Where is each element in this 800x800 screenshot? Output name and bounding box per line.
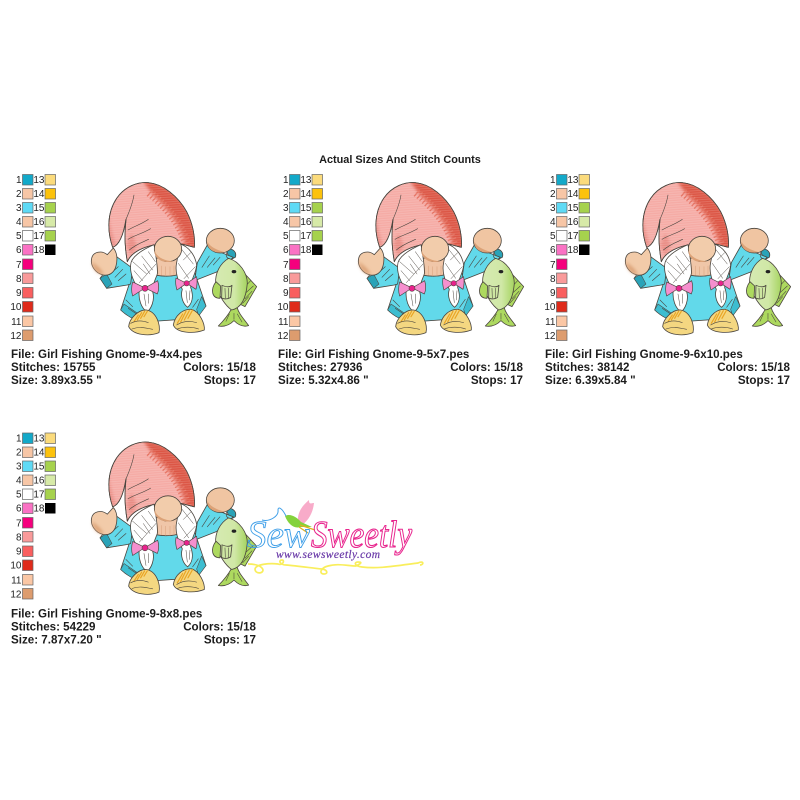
caption: Size: 6.39x5.84 " bbox=[545, 374, 636, 387]
color palette: 16 bbox=[33, 476, 45, 486]
color palette: 15 bbox=[33, 462, 45, 472]
color palette: 8 bbox=[283, 274, 289, 285]
color palette bbox=[10, 433, 56, 600]
color palette: 4 bbox=[16, 476, 22, 486]
gnome illustration bbox=[358, 182, 524, 335]
caption: File: Girl Fishing Gnome-9-6x10.pes bbox=[545, 348, 743, 361]
color palette: 13 bbox=[300, 175, 312, 186]
color palette: 4 bbox=[16, 217, 22, 228]
caption: Stitches: 38142 bbox=[545, 361, 629, 374]
icon: hummingbird bbox=[262, 500, 315, 533]
color palette: 2 bbox=[16, 448, 22, 458]
website url: www.sewsweetly.com bbox=[276, 549, 380, 561]
color palette: 7 bbox=[283, 260, 289, 271]
color palette: 18 bbox=[300, 245, 312, 256]
color palette: 14 bbox=[300, 189, 312, 200]
color palette: 6 bbox=[550, 245, 556, 256]
color palette: 9 bbox=[550, 288, 556, 299]
caption: Stops: 17 bbox=[738, 374, 790, 387]
caption: Colors: 15/18 bbox=[450, 361, 524, 374]
color palette: 7 bbox=[16, 518, 22, 530]
caption: File: Girl Fishing Gnome-9-4x4.pes bbox=[11, 348, 202, 361]
color palette: 13 bbox=[33, 434, 45, 444]
color palette: 5 bbox=[16, 231, 22, 242]
color palette: 6 bbox=[16, 245, 22, 256]
color palette: 1 bbox=[283, 175, 289, 186]
color palette: 13 bbox=[567, 175, 579, 186]
color palette: 16 bbox=[300, 217, 312, 228]
color palette: 8 bbox=[550, 274, 556, 285]
panel: 5x7 design bbox=[277, 174, 524, 387]
color palette: 5 bbox=[16, 490, 22, 500]
caption: Stops: 17 bbox=[204, 374, 256, 387]
color palette: 10 bbox=[10, 302, 22, 313]
color palette: 10 bbox=[544, 302, 556, 313]
panel: 4x4 design bbox=[10, 174, 257, 387]
title: Actual Sizes And Stitch Counts bbox=[319, 154, 481, 166]
gnome illustration bbox=[91, 441, 257, 594]
logo: Sew Sweetly bbox=[247, 500, 423, 574]
color palette: 10 bbox=[277, 302, 289, 313]
logo: Sew Sweetly: Sweetly bbox=[311, 514, 412, 556]
color palette bbox=[277, 174, 322, 342]
caption bbox=[11, 348, 257, 387]
caption: Size: 7.87x7.20 " bbox=[11, 634, 102, 646]
color palette: 5 bbox=[550, 231, 556, 242]
color palette: 3 bbox=[16, 462, 22, 472]
caption: Colors: 15/18 bbox=[183, 620, 257, 634]
caption: Stitches: 15755 bbox=[11, 361, 96, 374]
color palette: 11 bbox=[545, 317, 556, 328]
color palette: 14 bbox=[33, 448, 45, 458]
caption: Stops: 17 bbox=[471, 374, 523, 387]
color palette: 7 bbox=[550, 260, 556, 271]
color palette: 6 bbox=[283, 245, 289, 256]
color palette: 16 bbox=[33, 217, 45, 228]
color palette: 12 bbox=[277, 331, 289, 342]
caption: Size: 5.32x4.86 " bbox=[278, 374, 369, 387]
color palette: 11 bbox=[278, 317, 289, 328]
caption: Colors: 15/18 bbox=[183, 361, 257, 374]
color palette: 17 bbox=[33, 231, 45, 242]
color palette: 17 bbox=[567, 231, 579, 242]
color palette: 15 bbox=[33, 203, 45, 214]
color palette: 12 bbox=[10, 331, 22, 342]
color palette: 9 bbox=[16, 546, 22, 558]
panel: 8x8 design bbox=[10, 433, 257, 646]
color palette: 18 bbox=[33, 504, 45, 514]
color palette: 12 bbox=[10, 590, 22, 600]
caption: Stops: 17 bbox=[204, 634, 256, 646]
color palette: 4 bbox=[550, 217, 556, 228]
color palette: 2 bbox=[16, 189, 22, 200]
color palette: 5 bbox=[283, 231, 289, 242]
color palette: 18 bbox=[567, 245, 579, 256]
caption: Colors: 15/18 bbox=[717, 361, 791, 374]
color palette: 7 bbox=[16, 260, 22, 271]
color palette: 15 bbox=[567, 203, 579, 214]
caption bbox=[278, 348, 524, 387]
color palette: 4 bbox=[283, 217, 289, 228]
color palette: 18 bbox=[33, 245, 45, 256]
color palette: 3 bbox=[550, 203, 556, 214]
color palette: 13 bbox=[33, 175, 45, 186]
color palette: 9 bbox=[283, 288, 289, 299]
color palette: 1 bbox=[550, 175, 556, 186]
color palette: 2 bbox=[283, 189, 289, 200]
caption: Size: 3.89x3.55 " bbox=[11, 374, 102, 387]
caption: Stitches: 54229 bbox=[11, 620, 96, 634]
color palette: 6 bbox=[16, 504, 22, 514]
caption bbox=[545, 348, 791, 387]
color palette: 17 bbox=[300, 231, 312, 242]
color palette: 11 bbox=[11, 317, 22, 328]
color palette: 11 bbox=[11, 576, 22, 586]
color palette: 8 bbox=[16, 274, 22, 285]
panel: 6x10 design bbox=[544, 174, 791, 387]
caption: Stitches: 27936 bbox=[278, 361, 363, 374]
color palette bbox=[10, 174, 56, 342]
gnome illustration bbox=[91, 182, 257, 335]
color palette: 2 bbox=[550, 189, 556, 200]
color palette: 1 bbox=[16, 434, 22, 444]
gnome illustration bbox=[625, 182, 791, 335]
color palette: 3 bbox=[283, 203, 289, 214]
caption: File: Girl Fishing Gnome-9-5x7.pes bbox=[278, 348, 469, 361]
caption bbox=[11, 608, 257, 646]
color palette: 8 bbox=[16, 532, 22, 544]
color palette: 10 bbox=[10, 560, 22, 572]
logo: Sew Sweetly: Sew bbox=[247, 514, 311, 556]
color palette: 14 bbox=[567, 189, 579, 200]
color palette bbox=[544, 174, 590, 342]
decorative yellow squiggle bbox=[248, 560, 423, 574]
color palette: 17 bbox=[33, 490, 45, 500]
color palette: 16 bbox=[567, 217, 579, 228]
color palette: 14 bbox=[33, 189, 45, 200]
color palette: 1 bbox=[16, 175, 22, 186]
color palette: 9 bbox=[16, 288, 22, 299]
color palette: 3 bbox=[16, 203, 22, 214]
caption: File: Girl Fishing Gnome-9-8x8.pes bbox=[11, 608, 202, 620]
color palette: 15 bbox=[300, 203, 312, 214]
color palette: 12 bbox=[544, 331, 556, 342]
